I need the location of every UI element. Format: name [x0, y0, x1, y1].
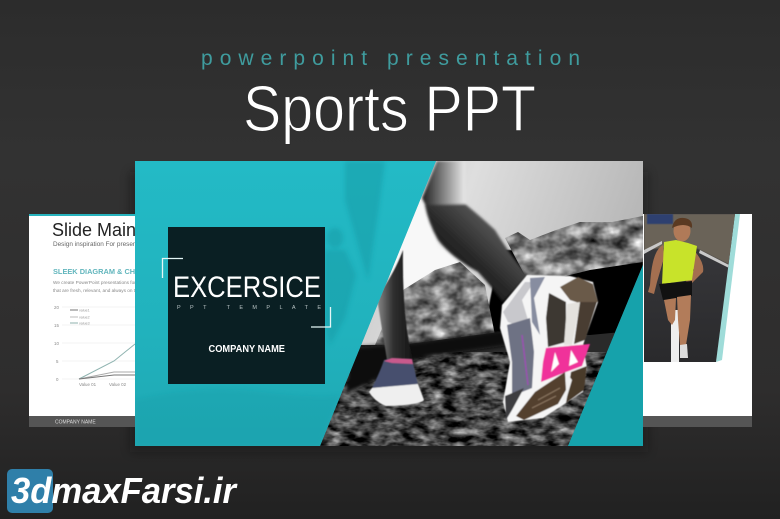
chart axis labels: 0 [56, 377, 59, 382]
runner [648, 218, 703, 358]
right hill [505, 216, 643, 276]
left slide footer text: COMPANY NAME [55, 420, 96, 426]
chart axis labels: Value 02 [109, 382, 127, 387]
line chart [54, 305, 135, 387]
chart legend: value3 [79, 322, 90, 326]
panel: right back slide [640, 214, 752, 427]
bright sky wedge [386, 185, 462, 290]
panel: main title slide [135, 161, 643, 446]
sky [320, 161, 643, 446]
right teal triangle [568, 265, 643, 446]
slide title: EXCERSICE: EXCERSICE [173, 271, 321, 304]
logo blue badge [7, 469, 53, 513]
chart legend: value1 [79, 308, 90, 312]
rear calf [377, 250, 413, 360]
right slide footer [640, 416, 752, 427]
left slide body text: that are fresh, relevant, and always on trend [53, 288, 145, 293]
heel sole [560, 277, 598, 305]
dark title square [168, 227, 325, 384]
dark hillside [488, 249, 643, 395]
panel: left back slide [29, 214, 174, 427]
large leg [422, 161, 528, 302]
left slide top strip [29, 214, 137, 216]
subtitle: powerpoint presentation: powerpoint presentation [201, 47, 580, 70]
light teal stripe [716, 214, 740, 362]
left slide section title: SLEEK DIAGRAM & CHART [53, 267, 151, 276]
large shoe [500, 275, 598, 422]
inner sole [546, 293, 566, 347]
chart legend: value2 [79, 316, 90, 320]
chart legend [70, 308, 90, 326]
bracket: bottom right [311, 307, 330, 327]
chart axis labels: 15 [54, 323, 59, 328]
slide subtitle: PPT TEMPLATE: PPT TEMPLATE [177, 305, 321, 311]
teal slide base [135, 161, 643, 446]
chart axis labels: Value 01 [79, 382, 97, 387]
faded runner silhouettes [325, 161, 384, 340]
left slide page [29, 214, 137, 427]
forefoot sole [516, 372, 566, 420]
photo: running shoes on trail [320, 161, 643, 446]
shoe upper top [503, 282, 531, 324]
left slide body text: We create PowerPoint presentations for you [53, 280, 145, 285]
logo: 3dmaxFarsi.ir watermark [7, 469, 238, 513]
thigh highlight [420, 161, 466, 207]
right slide page [640, 214, 752, 416]
chart axis labels: 5 [56, 359, 59, 364]
pink midsole [541, 344, 590, 382]
lower toe shadow [505, 388, 524, 420]
logo text: 3dmaxFarsi.ir [11, 470, 238, 511]
chart lines [79, 344, 135, 379]
rocky ground [320, 332, 615, 446]
bracket: top left [162, 258, 183, 278]
photo: runner on road [644, 214, 736, 362]
dark transition shadow [345, 330, 510, 395]
chart axis labels: 20 [54, 305, 59, 310]
left slide subheading: Design inspiration For presentations [53, 241, 155, 248]
purple stitching [522, 335, 528, 385]
left teal panel [135, 161, 436, 446]
chart axis labels: 10 [54, 341, 59, 346]
left hill [375, 262, 494, 345]
left slide heading: Slide Main Title [52, 220, 174, 240]
left slide footer [29, 416, 137, 427]
main slide shadow [130, 172, 648, 452]
shoe upper mesh [507, 318, 534, 396]
company name: COMPANY NAME [208, 343, 285, 355]
rear shoe [369, 358, 424, 406]
shoe silhouette [500, 275, 598, 422]
knee and calf [425, 204, 528, 302]
title: Sports PPT: Sports PPT [243, 72, 536, 145]
